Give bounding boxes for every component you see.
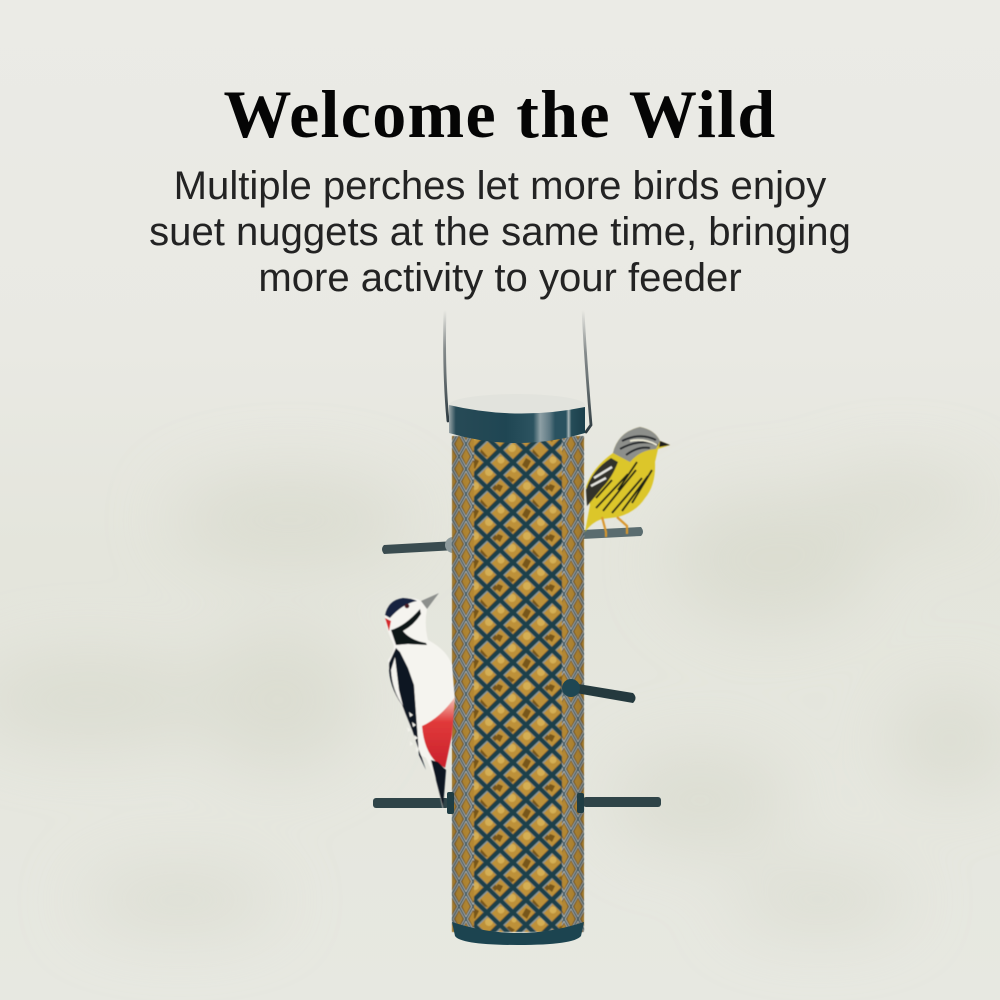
perch: upper right bbox=[582, 527, 643, 539]
suet and lattice mesh bbox=[452, 436, 584, 932]
feeder tube bbox=[452, 436, 584, 932]
description text: suet nuggets at the same time, bringing bbox=[149, 210, 851, 254]
bird: yellow warbler bbox=[585, 427, 670, 537]
perch: upper left bbox=[382, 537, 461, 554]
description text: Multiple perches let more birds enjoy bbox=[174, 164, 826, 208]
bottom cap bbox=[452, 922, 584, 945]
description text: more activity to your feeder bbox=[258, 256, 742, 300]
hanger wires bbox=[445, 310, 591, 432]
bird: great spotted woodpecker bbox=[385, 593, 455, 810]
top cap bbox=[449, 394, 585, 443]
fog blotches bbox=[0, 470, 1000, 930]
perch: lower left bbox=[373, 792, 454, 814]
perch: middle right bbox=[562, 679, 636, 703]
title: Welcome the Wild bbox=[224, 76, 776, 152]
description text bbox=[149, 164, 851, 300]
perch: lower right bbox=[577, 793, 661, 813]
